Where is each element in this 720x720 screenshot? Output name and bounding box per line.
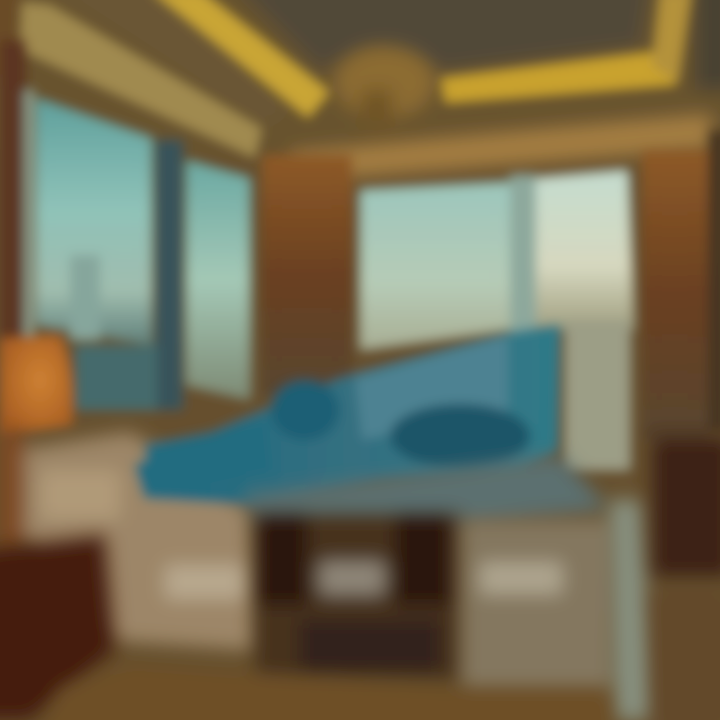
dark coffee table and chairs xyxy=(255,515,460,680)
right window panes xyxy=(360,170,634,470)
brown column left xyxy=(262,155,352,395)
orange table lamp xyxy=(0,335,73,435)
floor xyxy=(40,665,610,720)
cream sofa right xyxy=(462,520,612,690)
beam above right windows xyxy=(290,114,715,180)
cream sofa left xyxy=(0,430,255,650)
pale curtain strip xyxy=(610,500,655,720)
chandelier xyxy=(335,46,435,130)
left window panes xyxy=(0,40,250,410)
ceiling xyxy=(0,0,720,150)
teal chaise sofa xyxy=(135,324,560,505)
gold ceiling light strips xyxy=(20,0,692,158)
brown column right xyxy=(642,130,720,440)
murky reflection below sofa xyxy=(240,455,610,525)
dark cabinet right xyxy=(650,437,720,720)
dark brown armchair bottom left xyxy=(0,535,115,720)
